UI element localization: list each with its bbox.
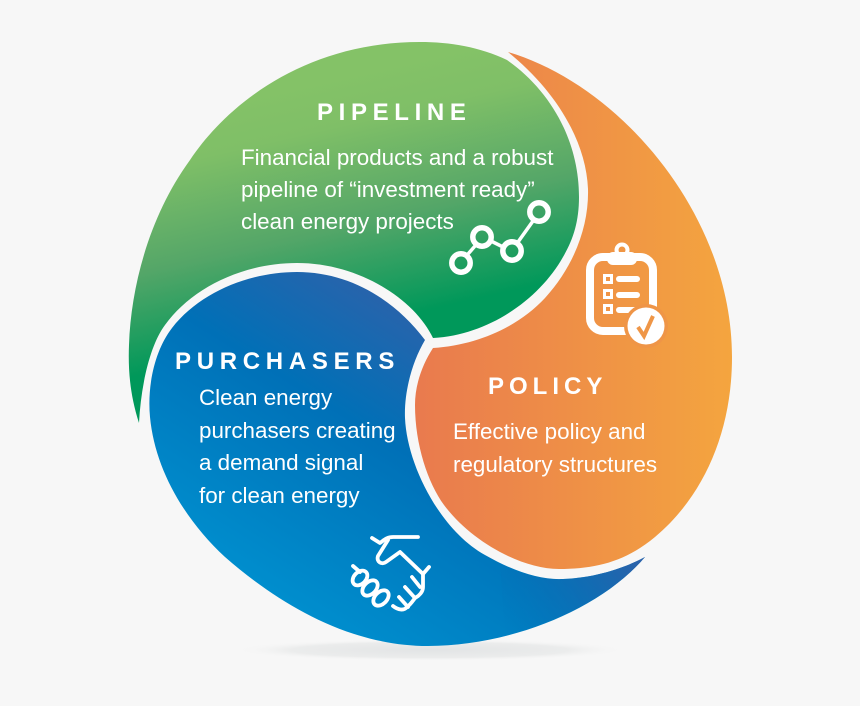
heading: pipeline: PIPELINE: [317, 99, 472, 126]
panel: policy: [415, 52, 732, 569]
text: purchasers description: a demand signal: [199, 450, 363, 475]
orange swirl segment: [415, 52, 732, 569]
text: pipeline description: [241, 145, 554, 234]
panel: pipeline: [129, 42, 579, 423]
panel: purchasers: [149, 272, 645, 646]
icon: handshake: [350, 537, 429, 610]
green swirl segment: [129, 42, 579, 423]
text: purchasers description: for clean energy: [199, 483, 360, 508]
icon: line chart with nodes: [452, 203, 548, 272]
text: purchasers description: Clean energy: [199, 385, 333, 410]
darker lower-right tip: [500, 557, 645, 636]
text: policy description: Effective policy and: [453, 419, 646, 444]
text: pipeline description: clean energy projects: [241, 209, 454, 234]
text: purchasers description: [199, 385, 396, 508]
ground shadow: [233, 639, 627, 661]
blue swirl segment: [149, 272, 645, 646]
text: pipeline description: pipeline of “investment ready”: [241, 177, 535, 202]
text: policy description: regulatory structures: [453, 452, 657, 477]
text: purchasers description: purchasers creating: [199, 418, 396, 443]
heading: policy: POLICY: [488, 373, 607, 400]
text: pipeline description: Financial products and a robust: [241, 145, 554, 170]
heading: purchasers: PURCHASERS: [175, 348, 400, 375]
icon: clipboard with check: [590, 244, 668, 348]
text: policy description: [453, 419, 657, 477]
